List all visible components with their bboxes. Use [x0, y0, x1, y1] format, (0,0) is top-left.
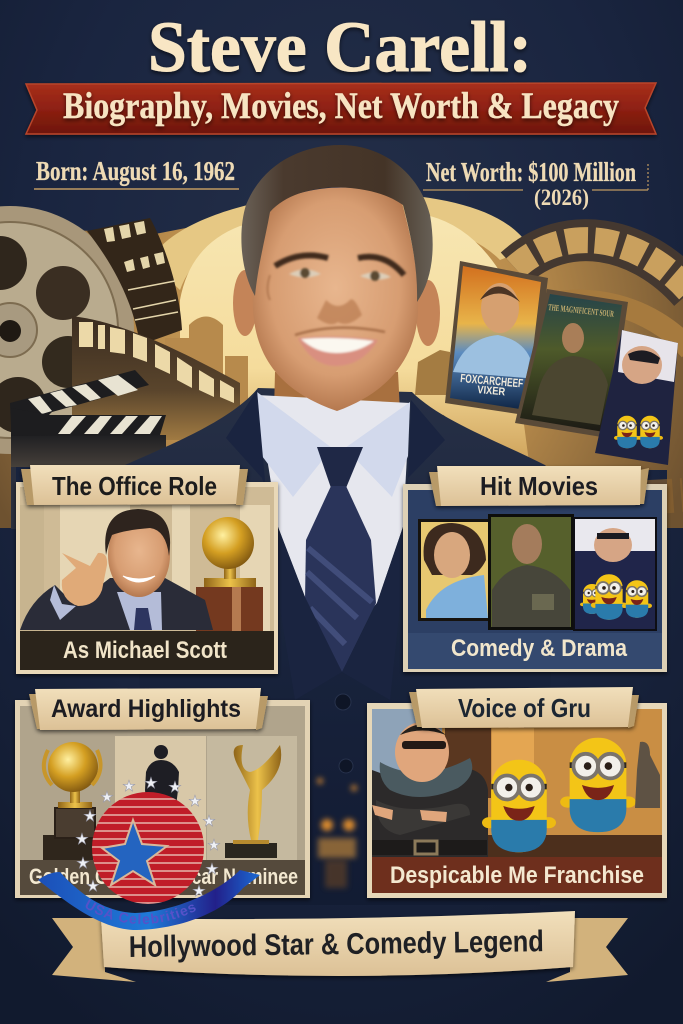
brows and eyes — [268, 255, 404, 335]
white stars: ★ — [122, 777, 136, 795]
tab: Award Highlights: Award Highlights — [51, 695, 241, 723]
hair — [241, 145, 433, 302]
tab: Voice of Gru: Voice of Gru — [458, 693, 591, 723]
tab: The Office Role — [21, 465, 248, 505]
white stars: ★ — [75, 830, 89, 848]
panel: Hit Movies — [403, 466, 667, 672]
poster: Gru and minions — [595, 330, 678, 465]
tab: Hit Movies: Hit Movies — [480, 471, 598, 501]
white stars: ★ — [205, 860, 219, 878]
white stars — [75, 774, 221, 900]
panel: Voice of Gru — [367, 687, 667, 898]
white stars: ★ — [202, 812, 216, 830]
blue star — [102, 820, 167, 885]
label: Golden Globe & Oscar Nominee: Golden Globe & Oscar Nominee — [29, 864, 298, 889]
collar left — [257, 392, 332, 497]
blue banner — [38, 870, 260, 930]
portrait: Steve Carell in suit — [125, 145, 560, 905]
minion small — [482, 760, 556, 852]
ears — [233, 270, 440, 346]
arch outer band — [150, 192, 530, 290]
tab: Hit Movies — [429, 466, 649, 506]
poster: blue shirt: VIXER — [477, 384, 506, 398]
trophy — [196, 517, 263, 631]
tie — [305, 447, 376, 672]
lapels — [226, 390, 342, 700]
bottom ribbon — [52, 911, 628, 982]
right film strip arc — [515, 240, 683, 350]
skyline right — [415, 350, 450, 395]
city skyline — [165, 316, 248, 418]
bokeh glow below suit — [317, 778, 357, 888]
tab: Award Highlights — [29, 688, 268, 730]
Gru — [372, 722, 488, 857]
logo: USA Celebrities badge — [38, 774, 260, 930]
net worth: (2026) — [534, 185, 589, 210]
label: Comedy & Drama: Comedy & Drama — [451, 635, 628, 662]
vest buttons — [335, 694, 353, 773]
slogan: Hollywood Star & Comedy Legend — [129, 925, 544, 964]
gold globe trophy — [43, 742, 101, 860]
white stars: ★ — [83, 807, 97, 825]
poster: blue shirt: FOXCARCHEEF — [460, 371, 524, 390]
arch inner pale area — [180, 214, 530, 470]
white stars: ★ — [207, 836, 221, 854]
statue background — [635, 742, 660, 808]
banner path text — [82, 906, 205, 924]
poster: soldier: THE MAGNIFICENT SOUR — [548, 302, 615, 319]
net worth — [423, 157, 648, 210]
title: Steve Carell: — [148, 7, 532, 87]
panel: Award Highlights — [15, 688, 310, 898]
left film strip tower — [87, 218, 182, 345]
oscar silhouette — [145, 745, 179, 840]
logo: USA Celebrities badge: USA Celebrities — [86, 899, 196, 924]
film strip bridge — [72, 316, 240, 440]
collar right — [345, 402, 410, 497]
Michael Scott figure — [20, 509, 213, 630]
white stars: ★ — [188, 792, 202, 810]
panel: The Office Role — [16, 465, 278, 674]
born date: Born: August 16, 1962 — [36, 156, 235, 186]
smile — [298, 336, 378, 366]
winged statue — [225, 745, 281, 858]
golden film studio backdrop — [0, 192, 683, 528]
poster: soldier — [515, 289, 628, 438]
face — [253, 187, 418, 411]
white stars: ★ — [168, 778, 182, 796]
label: Despicable Me Franchise: Despicable Me Franchise — [390, 862, 644, 889]
shirt — [257, 395, 410, 645]
poster 2 — [488, 514, 574, 630]
poster 3 — [573, 517, 657, 631]
white stars: ★ — [76, 854, 90, 872]
clapperboard — [10, 370, 166, 529]
lower right film arc — [430, 425, 683, 497]
nose shade — [317, 299, 362, 324]
neck — [274, 372, 400, 452]
film reel — [0, 206, 134, 454]
white stars: ★ — [100, 788, 114, 806]
white stars: ★ — [86, 877, 100, 895]
tab: The Office Role: The Office Role — [52, 471, 217, 501]
white stars: ★ — [192, 882, 206, 900]
striped red disc — [92, 792, 204, 904]
movie posters collage — [445, 261, 678, 465]
tab: Voice of Gru — [409, 687, 639, 728]
label: As Michael Scott: As Michael Scott — [63, 637, 227, 664]
minion large — [560, 738, 636, 832]
suit jacket — [125, 388, 560, 905]
poster: blue shirt — [445, 261, 548, 416]
white stars: ★ — [144, 774, 158, 792]
poster 1 — [418, 519, 489, 621]
